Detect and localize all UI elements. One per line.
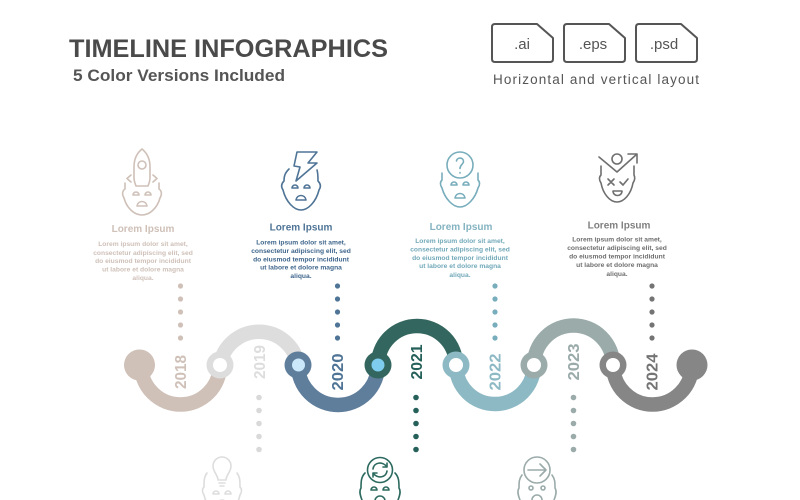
body text 2022 xyxy=(410,238,510,279)
body text 2018: ut labore et dolore magna xyxy=(102,266,184,274)
node 2021 xyxy=(364,352,392,378)
subtitle: 5 Color Versions Included xyxy=(73,67,285,85)
body text 2024: do eiusmod tempor incididunt xyxy=(569,254,666,260)
dotted connector 2020 xyxy=(335,283,340,341)
icon: lightning head 2020 xyxy=(282,152,320,210)
year 2018: 2018 xyxy=(173,355,190,389)
file format badges xyxy=(492,24,697,62)
file format badges: .psd xyxy=(650,36,678,53)
icon: refresh head 2021 xyxy=(360,458,400,500)
segment 2018 xyxy=(141,365,220,404)
body text 2022: consectetur adipiscing elit, sed xyxy=(410,246,510,254)
dotted connector 2021 xyxy=(413,395,419,452)
segment 2019 xyxy=(220,332,298,365)
segment 2021 xyxy=(378,326,456,365)
layout caption: Horizontal and vertical layout xyxy=(493,72,699,87)
body text 2024: Lorem ipsum dolor sit amet, xyxy=(572,236,662,244)
node 2022 xyxy=(442,352,470,378)
title: TIMELINE INFOGRAPHICS xyxy=(69,35,388,63)
year 2023: 2023 xyxy=(566,343,583,380)
segment 2023 xyxy=(534,326,613,365)
year 2019: 2019 xyxy=(252,345,269,379)
heading 2018: Lorem Ipsum xyxy=(112,224,174,235)
body text 2020 xyxy=(251,240,351,280)
body text 2022: Lorem ipsum dolor sit amet, xyxy=(415,238,505,245)
heading 2022: Lorem Ipsum xyxy=(430,222,492,233)
node 2023 xyxy=(520,352,548,378)
year 2020: 2020 xyxy=(330,353,347,390)
segment 2024 xyxy=(613,365,692,404)
body text 2024: consectetur adipiscing elit, sed xyxy=(567,245,667,252)
dotted connector 2023 xyxy=(571,395,576,452)
body text 2022: aliqua. xyxy=(449,272,471,279)
body text 2022: do eiusmod tempor incididunt xyxy=(412,255,509,262)
body text 2020: ut labore et dolore magna xyxy=(260,264,342,272)
icon: decision head 2024 xyxy=(599,154,637,202)
body text 2018: consectetur adipiscing elit, sed xyxy=(93,250,193,257)
node 2020 xyxy=(284,352,312,378)
body text 2022: ut labore et dolore magna xyxy=(419,263,501,270)
year 2022: 2022 xyxy=(488,353,504,390)
dotted connector 2018 xyxy=(178,283,183,341)
body text 2020: aliqua. xyxy=(290,273,312,280)
dotted connector 2022 xyxy=(492,283,498,341)
year 2021: 2021 xyxy=(409,344,426,380)
icon: rocket head 2018 xyxy=(123,149,161,215)
body text 2020: do eiusmod tempor incididunt xyxy=(253,256,350,264)
heading 2024: Lorem Ipsum xyxy=(588,220,650,232)
body text 2024: ut labore et dolore magna xyxy=(576,262,658,269)
body text 2020: consectetur adipiscing elit, sed xyxy=(251,248,351,255)
heading 2020: Lorem Ipsum xyxy=(270,222,332,234)
year 2024: 2024 xyxy=(644,353,662,390)
icon: question head 2022 xyxy=(440,152,480,207)
segment 2022 xyxy=(456,365,534,404)
dotted connector 2024 xyxy=(649,283,655,341)
dotted connector 2019 xyxy=(256,395,262,452)
body text 2018: Lorem ipsum dolor sit amet, xyxy=(98,241,188,248)
body text 2020: Lorem ipsum dolor sit amet, xyxy=(256,240,346,246)
end cap xyxy=(676,350,708,380)
body text 2018: do eiusmod tempor incididunt xyxy=(95,258,192,265)
file format badges: .ai xyxy=(514,36,530,53)
wave timeline xyxy=(124,326,708,405)
file format badges: .eps xyxy=(579,36,607,53)
body text 2018: aliqua. xyxy=(132,275,154,282)
node 2019 xyxy=(206,352,234,378)
body text 2024: aliqua. xyxy=(606,271,628,278)
segment 2020 xyxy=(298,365,378,405)
icon: arrow head 2023 xyxy=(518,457,556,500)
node 2024 xyxy=(600,352,626,378)
start cap xyxy=(124,350,155,380)
icon: light bulb head 2019 xyxy=(202,457,242,500)
body text 2018 xyxy=(93,241,193,282)
body text 2024 xyxy=(567,236,667,278)
